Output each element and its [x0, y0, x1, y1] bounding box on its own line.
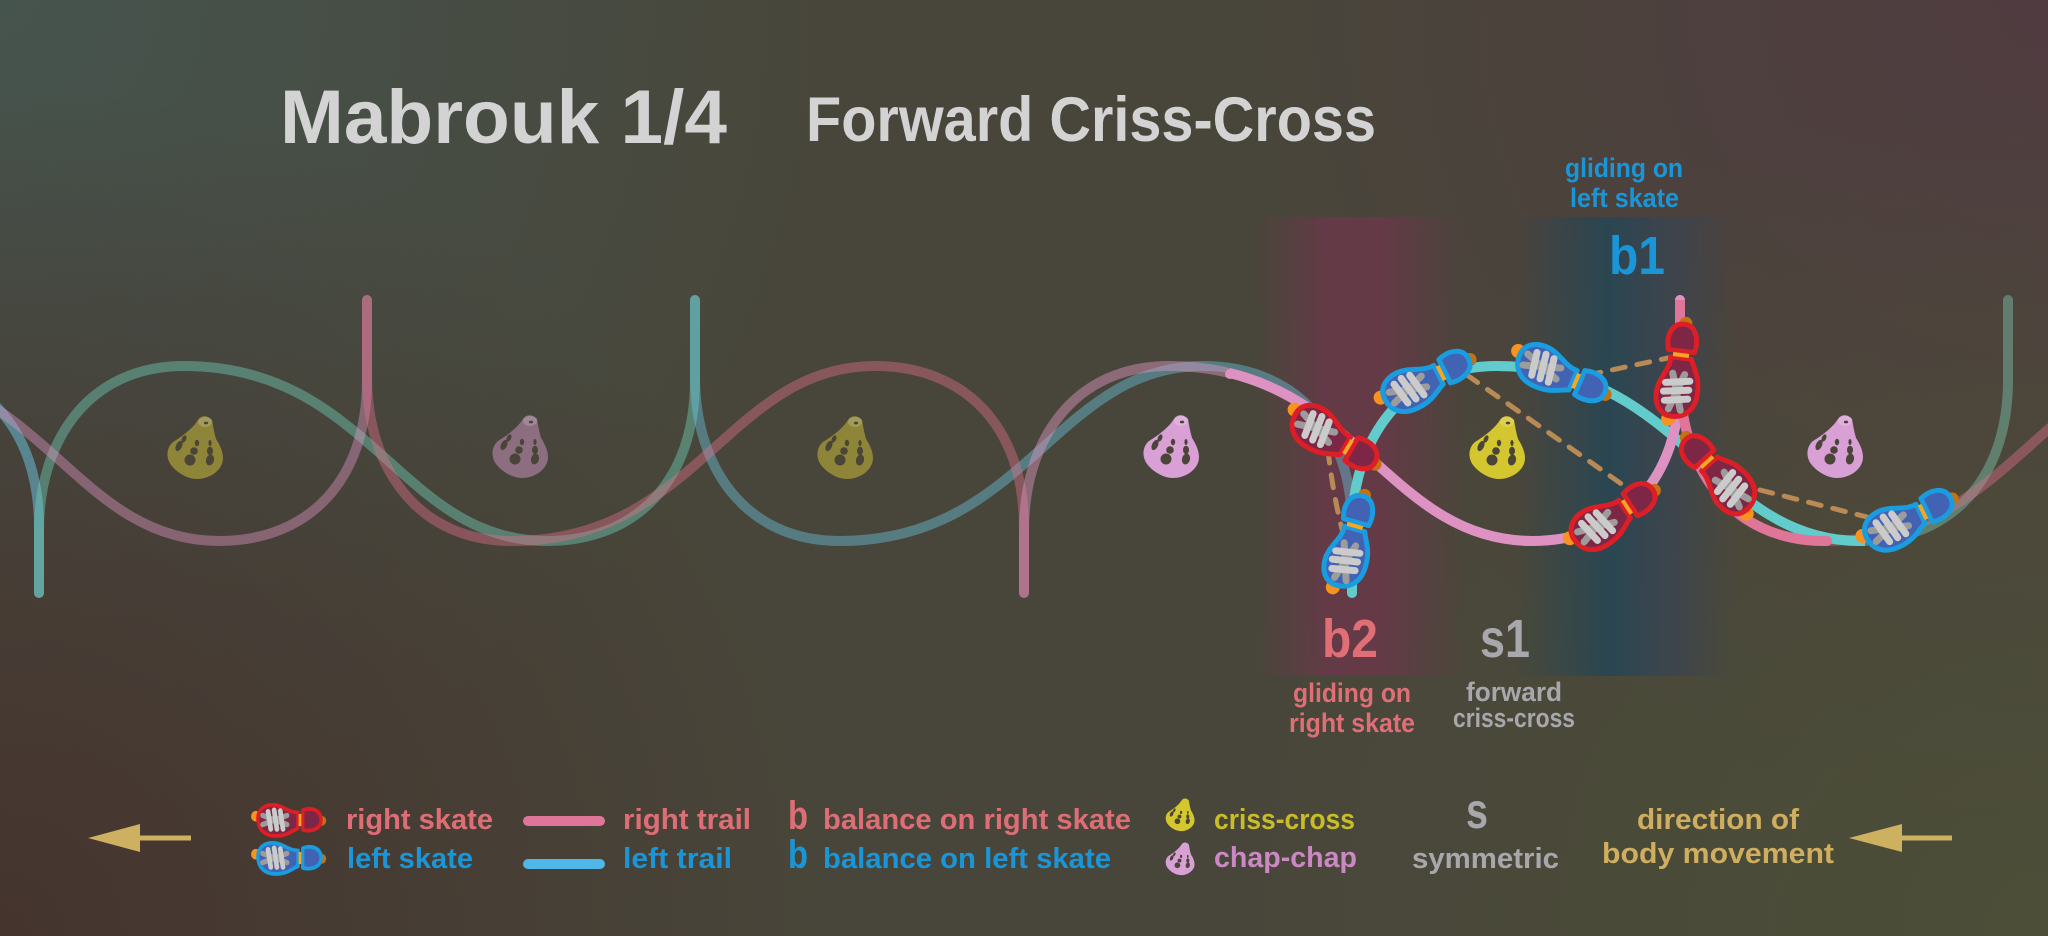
label: b2: b2 [1322, 609, 1378, 669]
label: gliding on left skate [1565, 153, 1683, 213]
cone: criss-cross faded [817, 416, 873, 479]
skate: right at b2 [1275, 393, 1391, 485]
legend: symmetric: s [1466, 783, 1488, 839]
label: gliding on right skate: right skate [1289, 708, 1415, 738]
legend: symmetric [1412, 783, 1559, 875]
label: gliding on left skate: gliding on [1565, 153, 1683, 183]
label: b1: b1 [1609, 226, 1665, 286]
active right trail end [1675, 300, 1832, 546]
skate: right at b1 [1652, 314, 1707, 429]
legend: direction of body movement: direction of [1637, 804, 1799, 836]
faded right trail [0, 300, 2048, 593]
dashed connectors between skates [1328, 358, 1867, 533]
legend: criss-cross [1166, 798, 1355, 836]
active left trail [1347, 361, 1865, 598]
legend: left skate [251, 843, 473, 875]
band: balance on right skate b2 [1255, 217, 1465, 676]
cone: chap-chap active [1807, 415, 1863, 478]
legend: symmetric: symmetric [1412, 843, 1559, 875]
label: forward criss-cross: forward [1466, 677, 1562, 707]
legend: balance on left skate: b [788, 833, 808, 877]
legend: criss-cross: criss-cross [1214, 804, 1355, 836]
arrow: left direction [88, 824, 191, 852]
label: forward criss-cross: criss-cross [1453, 703, 1575, 733]
skate: left at b2 [1316, 484, 1386, 601]
cone: criss-cross active [1469, 416, 1525, 479]
legend: balance on right skate: balance on right skate [823, 804, 1131, 836]
label: gliding on right skate [1289, 678, 1415, 738]
skate: right rising [1556, 469, 1671, 564]
subtitle: Forward Criss-Cross [806, 85, 1376, 155]
label: forward criss-cross [1453, 677, 1575, 733]
legend: balance on right skate [788, 794, 1131, 838]
skate: left descending [1502, 334, 1619, 415]
label: s1: s1 [1480, 609, 1530, 669]
title: Mabrouk 1/4 [280, 75, 727, 160]
legend: left skate: left skate [347, 843, 473, 875]
legend: direction of body movement: body movement [1602, 838, 1834, 870]
label: gliding on left skate: left skate [1570, 183, 1679, 213]
label: gliding on right skate: gliding on [1293, 678, 1411, 708]
skate: right after b1 [1666, 419, 1771, 529]
legend: right skate: right skate [346, 804, 493, 836]
arrow: right direction [1849, 824, 1952, 852]
legend: direction of body movement [1602, 804, 1834, 870]
active right trail [1225, 295, 1685, 546]
legend: balance on left skate: balance on left skate [823, 843, 1111, 875]
legend: balance on right skate: b [788, 794, 808, 838]
skate: left at right end [1850, 477, 1967, 562]
legend: balance on left skate [788, 833, 1111, 877]
legend: chap-chap: chap-chap [1214, 842, 1357, 874]
legend: right skate [251, 804, 493, 836]
band: balance on left skate b1 [1515, 217, 1735, 676]
faded left trail [0, 300, 2008, 593]
skate: left rising [1368, 338, 1485, 424]
cone: chap-chap faded [492, 415, 548, 478]
cone: chap-chap [1143, 415, 1199, 478]
legend: right trail: right trail [623, 804, 751, 836]
cone: criss-cross faded [167, 416, 223, 479]
legend: left trail: left trail [623, 843, 732, 875]
